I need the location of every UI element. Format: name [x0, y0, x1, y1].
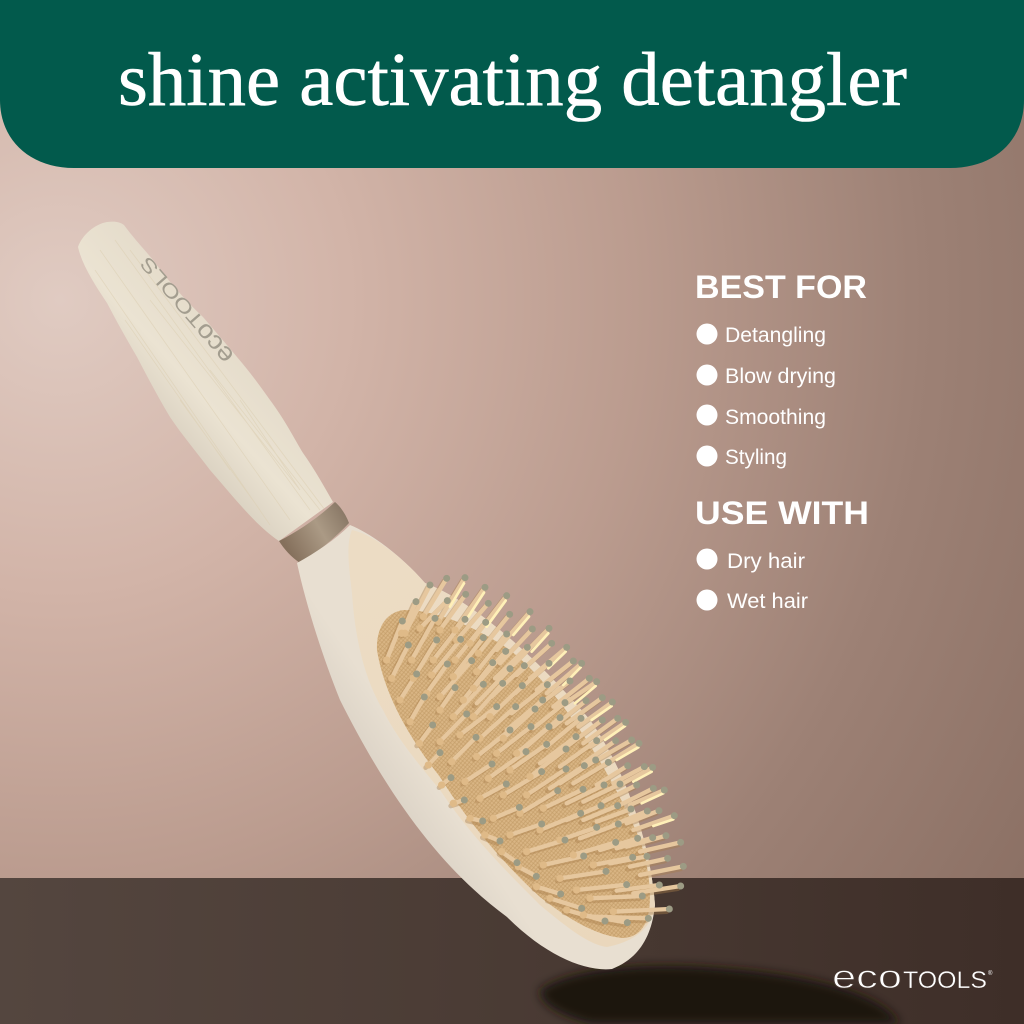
ecotools logo [832, 958, 993, 995]
item: smoothing: Smoothing [725, 406, 826, 429]
best for heading: BEST FOR [695, 269, 867, 305]
ecotools logo: ® [988, 970, 993, 977]
ecotools logo: TOOLS [903, 967, 987, 994]
item: detangling: Detangling [725, 324, 826, 347]
item: blow drying: Blow drying [725, 365, 836, 388]
item: dry hair [696, 548, 805, 573]
brush head side [297, 525, 655, 969]
handle logo [132, 251, 240, 369]
pin shafts shadow [384, 580, 681, 925]
best for section [695, 269, 867, 469]
item: dry hair: Dry hair [727, 550, 805, 573]
brush handle [78, 222, 333, 541]
item: styling: Styling [725, 446, 787, 469]
title banner [0, 0, 1024, 168]
pin base flares [387, 617, 613, 915]
bristle pad [377, 610, 650, 938]
pin ball tips [402, 578, 683, 923]
wooden pins [384, 578, 683, 925]
pin highlights [450, 583, 673, 826]
item: styling [696, 446, 787, 469]
use with section [695, 495, 869, 613]
hairbrush [78, 222, 683, 969]
item: wet hair [696, 590, 808, 613]
brush cast shadow [540, 966, 900, 1024]
use with heading: USE WITH [695, 495, 869, 531]
title: shine activating detangler [118, 38, 907, 122]
pin shafts [387, 578, 683, 923]
ecotools logo: eco [832, 958, 902, 995]
table surface [0, 878, 1024, 1024]
metal ferrule [279, 502, 349, 563]
brush head face [348, 530, 655, 947]
item: wet hair: Wet hair [727, 590, 808, 613]
handle logo: eco [189, 317, 240, 369]
handle logo: TOOLS [136, 252, 209, 331]
